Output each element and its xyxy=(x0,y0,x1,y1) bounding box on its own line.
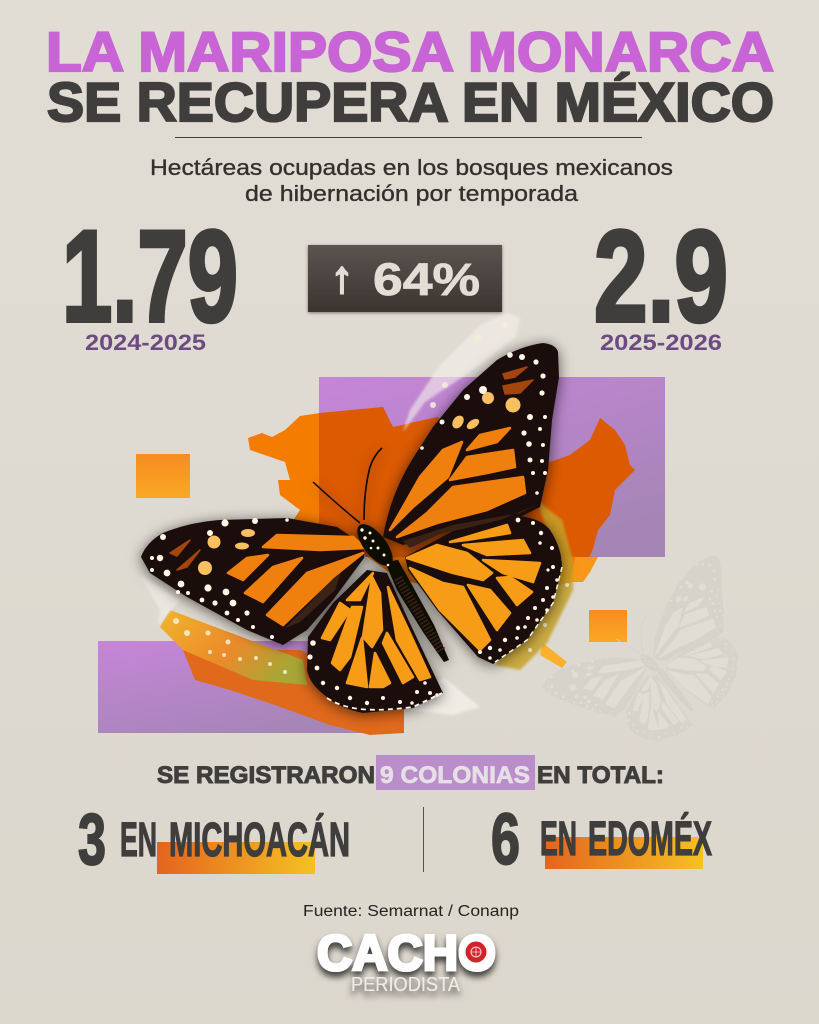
stat: increase badge: 64% xyxy=(373,254,480,305)
title: LA MARIPOSA MONARCA xyxy=(46,20,774,83)
title: SE RECUPERA EN MÉXICO xyxy=(47,71,774,133)
colonies heading: EN TOTAL: xyxy=(537,762,664,789)
subtitle: Hectáreas ocupadas en los bosques mexicanos xyxy=(150,155,673,180)
stat: Edoméx: EN xyxy=(540,813,577,866)
stat: 2025-2026: 2025-2026 xyxy=(600,330,722,355)
stat: Michoacán: 3 xyxy=(78,800,106,880)
subtitle: de hibernación por temporada xyxy=(245,181,579,206)
stat: 2024-2025: 1.79 xyxy=(62,203,238,349)
stat: 2024-2025 xyxy=(62,203,238,355)
stat: increase badge: ↑ xyxy=(331,253,353,302)
stat: Edoméx: EDOMÉX xyxy=(588,812,712,866)
colonies heading: SE REGISTRARON xyxy=(157,762,375,789)
ghost butterfly xyxy=(525,554,750,760)
logo: Cacho Periodista: CACHO xyxy=(317,925,496,981)
iridescent wing reflections xyxy=(140,313,573,715)
purple panel upper xyxy=(319,377,665,557)
colonies heading: 9 COLONIAS xyxy=(380,762,530,789)
decorative square left xyxy=(136,454,190,498)
logo: Cacho Periodista: PERIODISTA xyxy=(351,974,461,996)
stat: 2024-2025: 2024-2025 xyxy=(85,330,206,355)
subtitle xyxy=(150,155,673,206)
monarch butterfly xyxy=(141,343,562,713)
source: Fuente: Semarnat / Conanp xyxy=(303,903,519,920)
stat: Edoméx: 6 xyxy=(491,800,520,880)
stat: Michoacán xyxy=(78,800,350,880)
map of Mexico regions xyxy=(183,407,635,735)
stat: Michoacán: EN xyxy=(120,814,157,867)
stat: Edoméx xyxy=(491,800,712,880)
title xyxy=(46,20,774,133)
colonies heading xyxy=(157,755,664,790)
decorative square right xyxy=(589,610,627,642)
purple panel lower xyxy=(98,641,404,733)
stat: 2025-2026: 2.9 xyxy=(594,203,728,349)
stat: increase badge xyxy=(308,245,502,312)
stat: Michoacán: MICHOACÁN xyxy=(169,813,350,867)
